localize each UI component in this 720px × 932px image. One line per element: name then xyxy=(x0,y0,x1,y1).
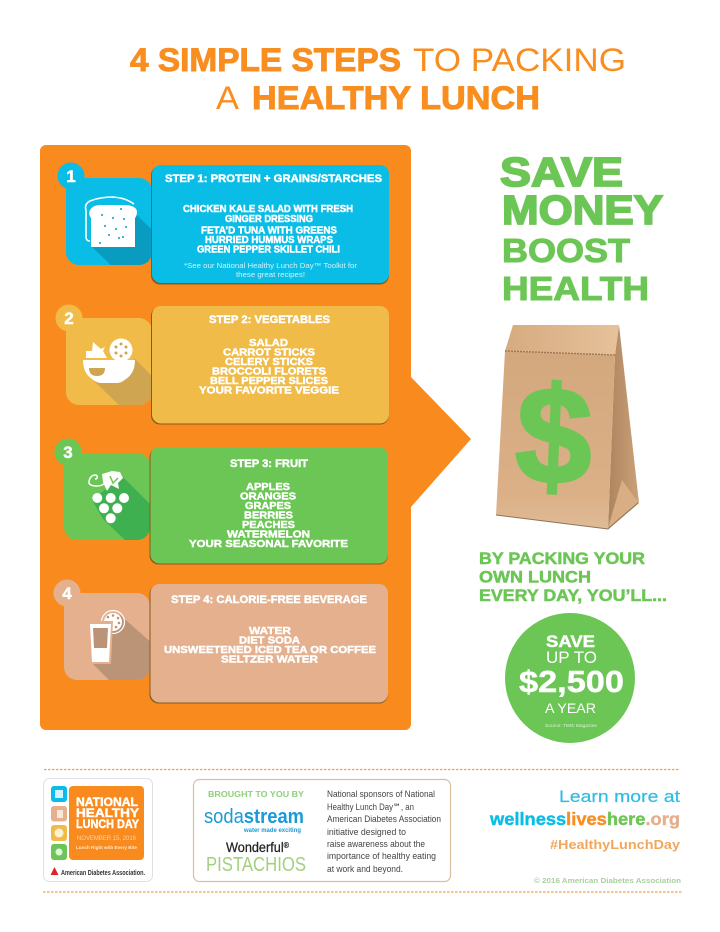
step 2 card xyxy=(151,306,389,424)
heading: save money boost health xyxy=(500,149,663,307)
step 2 list: CELERY STICKS xyxy=(225,356,313,368)
dashed divider bottom xyxy=(43,891,683,893)
step 1 list: FETA’D TUNA WITH GREENS xyxy=(201,226,337,236)
icon: paper bag with dollar sign xyxy=(496,325,639,529)
step 2 list: BELL PEPPER SLICES xyxy=(210,375,328,387)
logo: national healthy lunch day: LUNCH DAY xyxy=(76,817,139,831)
step 3 list: GRAPES xyxy=(245,500,291,512)
callout text: by packing your own lunch: BY PACKING YOUR xyxy=(479,550,645,568)
panel: orange steps background with arrow xyxy=(40,145,471,730)
step 2 list: BROCCOLI FLORETS xyxy=(212,366,326,378)
step 2 list: CARROT STICKS xyxy=(223,346,315,358)
call to action: learn more xyxy=(489,788,681,885)
call to action: learn more: wellnessliveshere.org xyxy=(489,809,680,829)
title: A xyxy=(216,80,240,116)
step 3 number badge xyxy=(54,438,82,466)
step 2 list xyxy=(199,337,339,396)
heading: save money boost health: MONEY xyxy=(502,187,663,233)
icon: paper bag with dollar sign: $ xyxy=(513,358,595,515)
callout: save up to $2,500 a year: Source: TIME Magazine xyxy=(545,723,598,728)
step 3 number badge: 3 xyxy=(63,443,73,462)
step 1 card xyxy=(151,165,389,284)
step 1 list: CHICKEN KALE SALAD WITH FRESH xyxy=(183,204,353,215)
sponsors heading: BROUGHT TO YOU BY xyxy=(208,790,305,799)
step 2 list: SALAD xyxy=(249,337,288,349)
callout: save up to $2,500 a year: SAVE xyxy=(546,632,595,651)
panel: step 4 xyxy=(54,580,388,704)
heading: save money boost health: HEALTH xyxy=(502,270,649,307)
step 1 heading: STEP 1: PROTEIN + GRAINS/STARCHES xyxy=(165,173,382,185)
step 2 number badge xyxy=(56,304,82,332)
logo: wonderful pistachios xyxy=(206,839,306,876)
step 1 footnote: these great recipes! xyxy=(236,270,305,279)
step 3 list: BERRIES xyxy=(244,510,293,522)
callout: save up to $2,500 a year xyxy=(505,613,635,743)
step 1 list: GINGER DRESSING xyxy=(225,214,313,225)
panel: step 2 xyxy=(56,304,389,424)
step 1 icon: bread xyxy=(66,178,156,268)
step 4 number badge xyxy=(54,580,80,606)
heading: save money boost health: BOOST xyxy=(502,232,630,269)
sponsors description: American Diabetes Association xyxy=(327,814,441,824)
step 4 heading: STEP 4: CALORIE-FREE BEVERAGE xyxy=(171,594,367,606)
step 4 list: SELTZER WATER xyxy=(221,654,318,666)
step 1 list: GREEN PEPPER SKILLET CHILI xyxy=(197,244,340,256)
logo: wonderful pistachios: ® xyxy=(284,841,289,850)
sponsors description: importance of healthy eating xyxy=(327,851,436,861)
heading: save money boost health: SAVE xyxy=(500,149,623,195)
logo: wonderful pistachios: PISTACHIOS xyxy=(206,854,306,876)
step 1 number badge xyxy=(58,162,84,190)
sponsors description xyxy=(327,789,441,874)
title xyxy=(130,42,626,116)
panel: step 1 xyxy=(58,162,389,284)
logo: national healthy lunch day xyxy=(44,778,152,882)
logo: sodastream: water made exciting xyxy=(243,827,301,834)
title: TO PACKING xyxy=(413,42,626,78)
step 3 list: PEACHES xyxy=(242,519,295,531)
callout: save up to $2,500 a year: A YEAR xyxy=(545,701,596,716)
sponsors description: raise awareness about the xyxy=(327,839,425,849)
panel: step 3 xyxy=(54,438,388,564)
step 3 list: WATERMELON xyxy=(227,528,310,540)
step 2 list: YOUR FAVORITE VEGGIE xyxy=(199,384,339,396)
sponsors description: initiative designed to xyxy=(327,827,406,837)
logo: wonderful pistachios: Wonderful xyxy=(226,839,290,855)
sponsors description: at work and beyond. xyxy=(327,864,403,874)
logo: national healthy lunch day: NATIONAL xyxy=(76,795,138,809)
step 3 heading: STEP 3: FRUIT xyxy=(230,458,308,470)
sponsors description: Healthy Lunch Day℠, an xyxy=(327,802,414,812)
callout: save up to $2,500 a year: UP TO xyxy=(546,649,597,667)
sponsors description: National sponsors of National xyxy=(327,789,435,799)
call to action: learn more: Learn more at xyxy=(559,788,680,806)
logo: national healthy lunch day: HEALTHY xyxy=(76,806,139,820)
title: 4 SIMPLE STEPS xyxy=(130,42,401,78)
step 3 list: APPLES xyxy=(246,481,290,493)
step 1 number badge: 1 xyxy=(66,167,76,186)
step 3 list: YOUR SEASONAL FAVORITE xyxy=(189,538,348,550)
call to action: learn more: #HealthyLunchDay xyxy=(550,838,680,852)
dashed divider top xyxy=(44,768,680,770)
logo: national healthy lunch day: NOVEMBER 15, 2016 xyxy=(77,835,136,842)
step 3 list: ORANGES xyxy=(240,490,296,502)
step 2 number badge: 2 xyxy=(64,309,74,328)
logo: national healthy lunch day: American Diabetes Association. xyxy=(61,870,145,877)
step 1 footnote xyxy=(184,261,358,279)
callout text: by packing your own lunch: EVERY DAY, YOU’LL... xyxy=(479,587,667,605)
logo: sodastream: sodastream xyxy=(204,806,304,828)
step 4 list: DIET SODA xyxy=(239,634,300,646)
step 2 heading: STEP 2: VEGETABLES xyxy=(209,314,330,326)
step 1 footnote: *See our National Healthy Lunch Day™ Toolkit for xyxy=(184,261,358,270)
step 4 card xyxy=(150,584,388,704)
step 4 list: UNSWEETENED ICED TEA OR COFFEE xyxy=(164,644,376,656)
step 3 icon: grapes xyxy=(64,453,154,543)
callout text: by packing your own lunch: OWN LUNCH xyxy=(479,568,591,586)
step 1 list xyxy=(183,204,353,256)
callout text: by packing your own lunch xyxy=(479,550,667,605)
step 4 icon: beverage glass xyxy=(64,593,154,683)
step 4 list: WATER xyxy=(249,625,291,637)
step 1 list: HURRIED HUMMUS WRAPS xyxy=(205,235,333,246)
step 4 number badge: 4 xyxy=(62,584,72,603)
step 3 list xyxy=(189,481,348,550)
title: HEALTHY LUNCH xyxy=(252,80,540,116)
step 4 list xyxy=(164,625,376,666)
callout: save up to $2,500 a year: $2,500 xyxy=(519,664,624,699)
call to action: learn more: © 2016 American Diabetes Association xyxy=(534,876,681,885)
panel: sponsors xyxy=(194,780,450,882)
logo: national healthy lunch day: Lunch Right with Every Bite xyxy=(76,845,137,850)
step 2 icon: salad bowl xyxy=(66,318,156,408)
step 3 card xyxy=(150,447,388,564)
